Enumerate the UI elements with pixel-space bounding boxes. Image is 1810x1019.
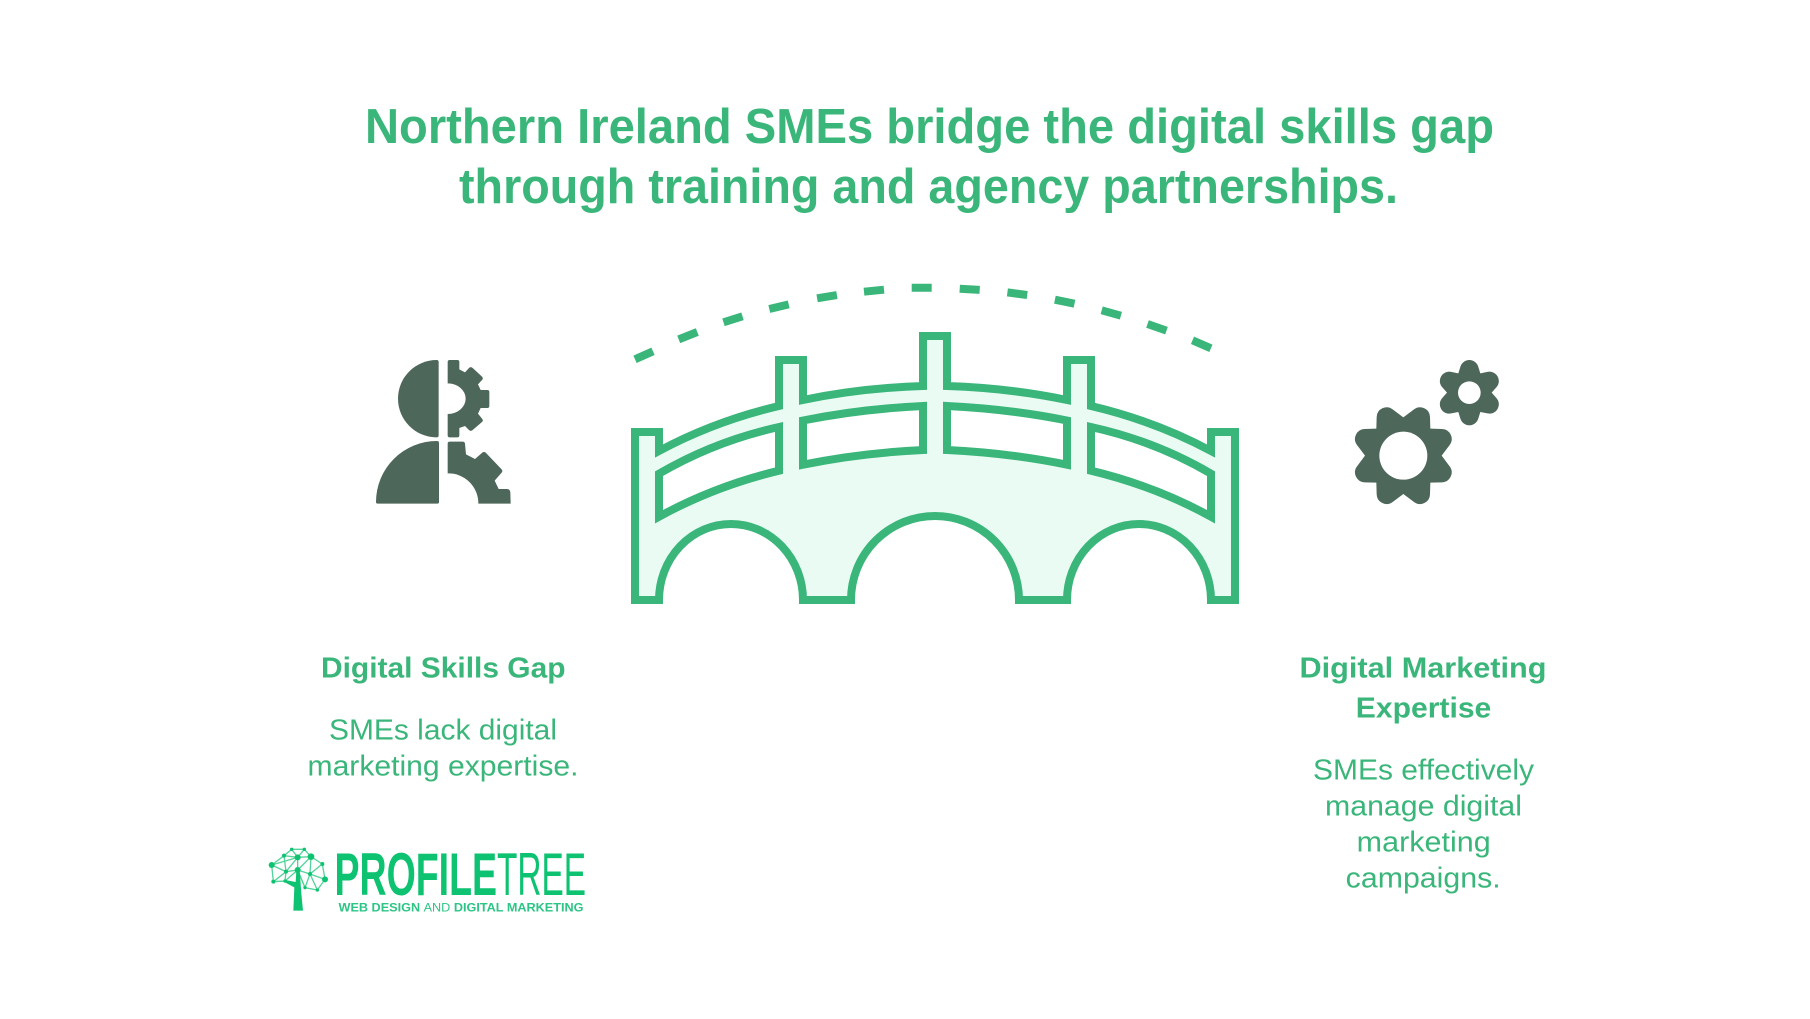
description: right: manage digital — [1325, 790, 1522, 822]
bridge body — [635, 336, 1235, 600]
railing openings — [659, 406, 1211, 517]
bridge illustration — [635, 336, 1235, 600]
description: right: SMEs effectively — [1313, 754, 1535, 786]
title — [365, 100, 1494, 214]
title: Northern Ireland SMEs bridge the digital skills gap — [365, 100, 1494, 154]
logo wordmark: TREE — [497, 841, 586, 908]
dashed arc above bridge — [635, 288, 1211, 359]
logo tagline: WEB DESIGN AND DIGITAL MARKETING — [338, 902, 584, 914]
left column: digital skills gap — [308, 652, 578, 783]
icon: person with gear (digital skills gap) — [376, 360, 511, 504]
description: left: marketing expertise. — [308, 751, 578, 783]
logo tree mark — [269, 848, 328, 911]
description: right: campaigns. — [1346, 862, 1501, 894]
heading: digital marketing expertise: Digital Marketing — [1300, 652, 1546, 684]
right column: digital marketing expertise — [1300, 652, 1546, 894]
icon: two gears (digital marketing expertise) — [1355, 360, 1499, 504]
logo: ProfileTree — [269, 841, 586, 914]
large gear — [1355, 407, 1452, 504]
description: left: SMEs lack digital — [329, 714, 557, 746]
heading: digital marketing expertise: Expertise — [1356, 692, 1491, 724]
heading: digital skills gap: Digital Skills Gap — [321, 652, 566, 684]
logo wordmark: PROFILE — [334, 841, 497, 908]
description: right — [1313, 754, 1535, 894]
description: left — [308, 714, 578, 783]
small gear — [1440, 360, 1499, 425]
heading: digital marketing expertise — [1300, 652, 1546, 724]
title: through training and agency partnerships. — [459, 160, 1398, 214]
description: right: marketing — [1357, 826, 1491, 858]
